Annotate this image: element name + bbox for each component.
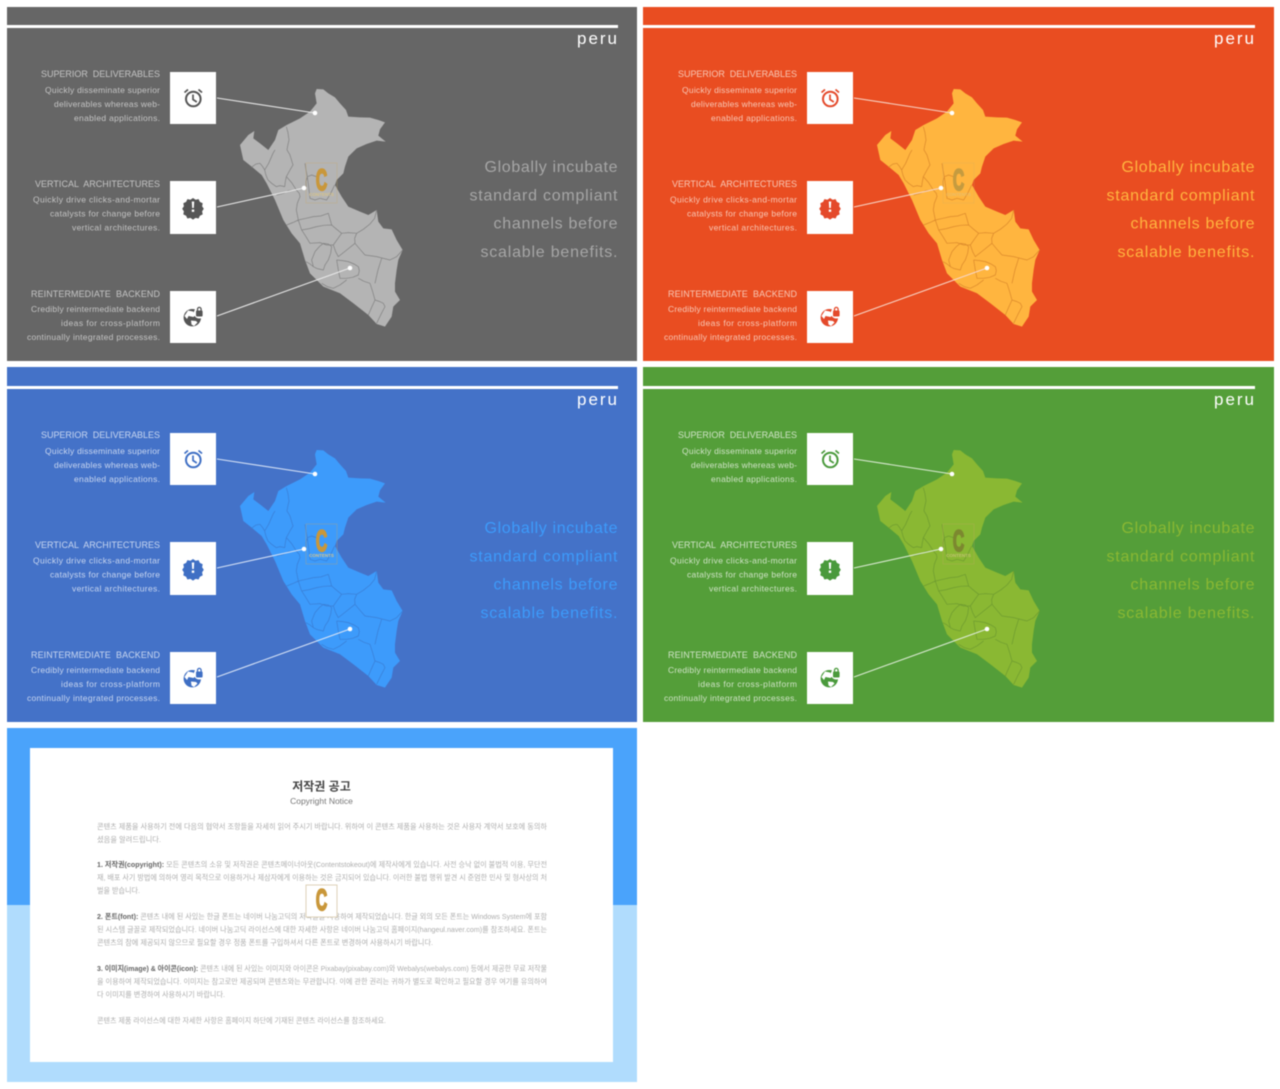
- item: vertical architectures: vertical architectures.: [709, 222, 797, 232]
- item: vertical architectures: vertical architectures.: [72, 584, 160, 594]
- item: vertical architectures: Quickly drive clicks-and-mortar: [33, 556, 160, 566]
- item: superior deliverables: [41, 69, 160, 123]
- item: superior deliverables: Quickly disseminate superior: [682, 446, 797, 456]
- watermark: C: [316, 526, 327, 559]
- item: superior deliverables: SUPERIOR DELIVERABLES: [41, 430, 160, 440]
- item: reintermediate backend: ideas for cross-platform: [698, 679, 797, 689]
- item: superior deliverables: SUPERIOR DELIVERABLES: [678, 430, 797, 440]
- watermark: [306, 524, 337, 564]
- paragraph 2: font: 2. 폰트(font): 콘텐츠 내에 된 사있는 한글 폰트는 네이버 나눔고딕의 저작물을 사용하여 제작되었습니다. 한글 외의 모든 폰트는 Windows System에 포함: [97, 911, 547, 921]
- item: superior deliverables: enabled applications.: [74, 113, 160, 123]
- item: reintermediate backend: Credibly reintermediate backend: [668, 304, 797, 314]
- callout lines: [217, 459, 352, 677]
- callout lines: [854, 98, 989, 316]
- watermark: C: [953, 165, 964, 198]
- item: superior deliverables: enabled applications.: [74, 474, 160, 484]
- icon: clock: [170, 72, 216, 124]
- paragraph 1: copyright: 재, 배포 사기 방법에 의하여 영리 목적으로 이용하거나 제삼자에게 이용하는 것은 금지되어 있습니다. 이러한 불법 행위 발견 시 준엄한 민사 및 형사상의 처: [97, 872, 547, 882]
- paragraph 2: font: 된 시스템 글꼴로 제작되었습니다. 네이버 나눔고딕 라이선스에 대한 자세한 사항은 네이버 나눔고딕 홈페이지(hangeul.naver.com)를 참조하세요. 폰트는: [97, 924, 547, 934]
- statement text: standard compliant: [470, 188, 618, 204]
- icon: secure globe: [170, 291, 216, 343]
- icon: clock: [170, 433, 216, 485]
- statement text: [1106, 520, 1255, 622]
- watermark: [943, 163, 974, 203]
- statement text: standard compliant: [1106, 548, 1255, 566]
- item: vertical architectures: vertical architectures.: [709, 584, 797, 594]
- intro paragraph: 셨음을 알려드립니다.: [97, 834, 161, 844]
- item: superior deliverables: Quickly disseminate superior: [45, 446, 160, 456]
- paragraph 3: image and icon: 을 이용하여 제작되었습니다. 이미지는 참고로만 제공되며 콘텐츠와는 무관합니다. 이에 관한 권리는 귀하가 별도로 확인하고 필요할 경우 여기를 유의하여: [97, 976, 547, 986]
- item: vertical architectures: [670, 540, 797, 594]
- watermark: C: [316, 885, 327, 918]
- paragraph 1: copyright: [97, 859, 547, 895]
- closing paragraph: 콘텐츠 제품 라이선스에 대한 자세한 사항은 홈페이지 하단에 기재된 콘텐츠 라이선스를 참조하세요.: [97, 1015, 386, 1025]
- item: vertical architectures: [670, 179, 797, 232]
- statement text: Globally incubate: [1122, 159, 1255, 176]
- watermark: C: [316, 165, 327, 198]
- paragraph 2: font: 콘텐츠의 참에 제공되지 않으므로 필요할 경우 정품 폰트를 구입하셔서 다른 폰트로 변경하여 사용하시기 바랍니다.: [97, 937, 433, 947]
- statement text: scalable benefits.: [480, 244, 618, 261]
- intro paragraph: 콘텐츠 제품을 사용하기 전에 다음의 협약서 조항들을 자세히 읽어 주시기 바랍니다. 위하여 이 콘텐츠 제품을 사용하는 것은 사용자 계약서 보호에 동의하: [97, 821, 547, 831]
- heading: copyright: 저작권 공고: [292, 778, 351, 794]
- statement text: Globally incubate: [484, 520, 618, 537]
- item: vertical architectures: VERTICAL ARCHITECTURES: [35, 179, 160, 189]
- item: vertical architectures: vertical architectures.: [72, 222, 160, 232]
- statement text: scalable benefits.: [480, 605, 618, 622]
- panel: blue Peru map: [7, 367, 637, 722]
- statement text: channels before: [494, 576, 618, 594]
- item: reintermediate backend: ideas for cross-platform: [698, 318, 797, 328]
- paragraph 2: font: [97, 911, 547, 947]
- statement text: [470, 159, 618, 261]
- watermark: CONTENTS: [946, 553, 971, 558]
- item: superior deliverables: SUPERIOR DELIVERABLES: [41, 69, 160, 79]
- icon: alert badge: [170, 542, 216, 595]
- item: vertical architectures: catalysts for change before: [50, 570, 160, 580]
- title: peru: peru: [577, 390, 617, 409]
- item: reintermediate backend: REINTERMEDIATE BACKEND: [668, 650, 798, 660]
- watermark: C: [953, 526, 964, 559]
- item: reintermediate backend: [664, 650, 798, 703]
- intro paragraph: [97, 821, 547, 844]
- item: vertical architectures: [33, 540, 160, 594]
- heading: copyright: Copyright Notice: [290, 796, 353, 806]
- item: reintermediate backend: Credibly reintermediate backend: [668, 665, 797, 675]
- map of Peru: [240, 89, 403, 327]
- panel: copyright notice: [7, 728, 637, 1082]
- icon: secure globe: [807, 291, 853, 343]
- item: superior deliverables: deliverables whereas web-: [691, 460, 797, 470]
- item: reintermediate backend: continually integrated processes.: [27, 332, 160, 342]
- watermark: [943, 524, 974, 564]
- item: vertical architectures: Quickly drive clicks-and-mortar: [670, 556, 797, 566]
- item: vertical architectures: VERTICAL ARCHITECTURES: [672, 179, 797, 189]
- paragraph 3: image and icon: 다 이미지를 변경하여 사용하시기 바랍니다.: [97, 989, 225, 999]
- icon: clock: [807, 433, 853, 485]
- item: superior deliverables: Quickly disseminate superior: [45, 85, 160, 95]
- item: superior deliverables: deliverables whereas web-: [691, 99, 797, 109]
- item: vertical architectures: catalysts for change before: [50, 208, 160, 218]
- item: superior deliverables: [678, 430, 797, 484]
- icon: alert badge: [807, 181, 853, 234]
- statement text: scalable benefits.: [1118, 605, 1254, 622]
- item: superior deliverables: deliverables whereas web-: [54, 460, 160, 470]
- watermark: CONTENTS: [946, 192, 971, 197]
- item: vertical architectures: Quickly drive clicks-and-mortar: [33, 194, 160, 204]
- item: reintermediate backend: continually integrated processes.: [664, 693, 797, 703]
- title: peru: peru: [577, 29, 617, 48]
- paragraph 1: copyright: 1. 저작권(copyright): 모든 콘텐츠의 소유 및 저작권은 콘텐츠메이너아웃(Contentstokeout)에 제작사에게 있습니다. 사전 승낙 없이 불법적 이용, 무단전: [97, 859, 547, 869]
- panel: orange Peru map: [643, 7, 1274, 361]
- item: superior deliverables: [678, 69, 797, 123]
- item: vertical architectures: VERTICAL ARCHITECTURES: [672, 540, 797, 550]
- watermark: CONTENTS: [309, 553, 334, 558]
- callout lines: [854, 459, 989, 677]
- paragraph 3: image and icon: [97, 963, 547, 999]
- item: reintermediate backend: continually integrated processes.: [664, 332, 797, 342]
- item: reintermediate backend: [664, 289, 798, 342]
- watermark: [306, 163, 337, 203]
- map of Peru: [877, 450, 1040, 688]
- icon: secure globe: [170, 652, 216, 704]
- icon: clock: [807, 72, 853, 124]
- item: reintermediate backend: REINTERMEDIATE BACKEND: [31, 650, 160, 660]
- item: reintermediate backend: ideas for cross-platform: [61, 679, 160, 689]
- item: reintermediate backend: REINTERMEDIATE BACKEND: [668, 289, 798, 299]
- title: peru: peru: [1214, 390, 1254, 409]
- statement text: channels before: [1130, 576, 1255, 594]
- statement text: channels before: [1130, 216, 1255, 232]
- item: vertical architectures: catalysts for change before: [687, 208, 797, 218]
- icon: alert badge: [807, 542, 853, 595]
- icon: alert badge: [170, 181, 216, 234]
- item: superior deliverables: SUPERIOR DELIVERABLES: [678, 69, 797, 79]
- map of Peru: [240, 450, 403, 688]
- statement text: [1106, 159, 1255, 261]
- statement text: [470, 520, 618, 622]
- item: reintermediate backend: continually integrated processes.: [27, 693, 160, 703]
- item: reintermediate backend: [27, 650, 160, 703]
- item: superior deliverables: [41, 430, 160, 484]
- statement text: channels before: [494, 216, 618, 232]
- statement text: Globally incubate: [484, 159, 618, 176]
- item: superior deliverables: enabled applications.: [711, 474, 797, 484]
- item: reintermediate backend: ideas for cross-platform: [61, 318, 160, 328]
- icon: secure globe: [807, 652, 853, 704]
- paragraph 1: copyright: 벌을 받습니다.: [97, 885, 140, 895]
- statement text: scalable benefits.: [1118, 244, 1254, 261]
- item: reintermediate backend: Credibly reintermediate backend: [31, 665, 160, 675]
- panel: green Peru map: [643, 367, 1274, 722]
- watermark: CONTENTS: [309, 192, 334, 197]
- item: superior deliverables: Quickly disseminate superior: [682, 85, 797, 95]
- watermark: [306, 885, 337, 918]
- statement text: standard compliant: [1106, 188, 1255, 204]
- statement text: standard compliant: [470, 548, 618, 566]
- map of Peru: [877, 89, 1040, 327]
- item: vertical architectures: VERTICAL ARCHITECTURES: [35, 540, 160, 550]
- item: reintermediate backend: REINTERMEDIATE BACKEND: [31, 289, 160, 299]
- item: superior deliverables: enabled applications.: [711, 113, 797, 123]
- item: reintermediate backend: Credibly reintermediate backend: [31, 304, 160, 314]
- item: reintermediate backend: [27, 289, 160, 342]
- item: vertical architectures: catalysts for change before: [687, 570, 797, 580]
- heading: copyright: [290, 778, 353, 806]
- item: vertical architectures: [33, 179, 160, 232]
- item: superior deliverables: deliverables whereas web-: [54, 99, 160, 109]
- statement text: Globally incubate: [1122, 520, 1255, 537]
- title: peru: peru: [1214, 29, 1254, 48]
- panel: grey Peru map: [7, 7, 637, 361]
- item: vertical architectures: Quickly drive clicks-and-mortar: [670, 194, 797, 204]
- paragraph 3: image and icon: 3. 이미지(image) & 아이콘(icon): 콘텐츠 내에 된 사있는 이미지와 아이콘은 Pixabay(pixabay.com)와 Webalys(webalys.com) 등에서 제공한 무료 저작물: [97, 963, 547, 973]
- callout lines: [217, 98, 352, 316]
